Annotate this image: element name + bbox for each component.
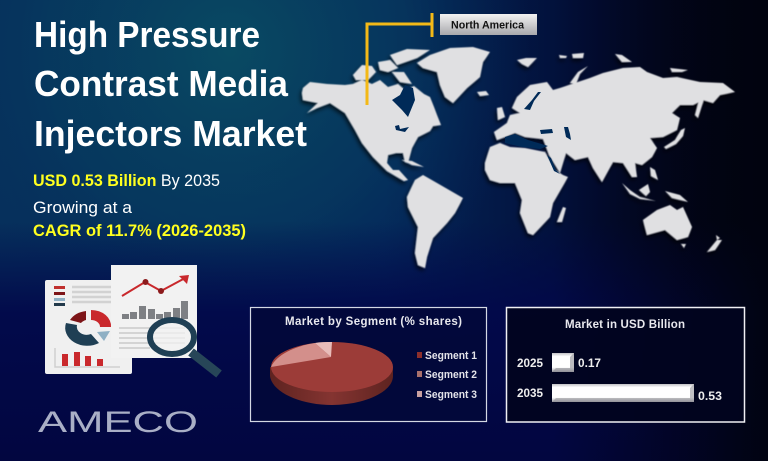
left document <box>45 280 132 374</box>
Novaya Zemlya <box>570 66 588 84</box>
panel heading: Market by Segment (% shares) <box>285 316 462 328</box>
Svalbard and arctic <box>559 53 688 72</box>
logo: AMECO <box>38 406 198 439</box>
small north Atlantic island <box>477 91 489 96</box>
right document <box>111 265 197 358</box>
title: Contrast Media <box>34 63 289 104</box>
market value text: USD 0.53 Billion By 2035 <box>33 171 220 190</box>
title: Injectors Market <box>34 113 307 154</box>
Tasmania <box>681 244 686 248</box>
New Guinea <box>665 191 688 202</box>
market value text: CAGR of 11.7% (2026-2035) <box>33 221 246 240</box>
Philippines <box>650 167 658 180</box>
Iceland <box>517 58 537 67</box>
Cuba <box>402 160 424 167</box>
icon: report documents with magnifier <box>45 265 219 374</box>
North America <box>302 80 441 181</box>
magnifier <box>150 320 219 374</box>
bar 2025 <box>517 353 601 372</box>
bar 2035: 2035 <box>517 386 543 400</box>
Kamchatka <box>695 99 704 118</box>
region label: North America <box>451 20 525 32</box>
bar 2025: 2025 <box>517 356 543 370</box>
connector line <box>367 13 432 105</box>
UK <box>497 107 505 120</box>
market value text <box>33 171 246 240</box>
Africa <box>485 143 568 235</box>
market value text: Growing at a <box>33 198 133 217</box>
Borneo <box>639 184 650 196</box>
inland seas <box>392 85 571 174</box>
panel heading: Market in USD Billion <box>565 319 685 331</box>
South America <box>407 175 463 268</box>
title: High Pressure <box>34 14 260 55</box>
Eurasia <box>494 67 735 182</box>
legend: Segment 1 <box>425 350 477 362</box>
bar 2025: 0.17 <box>578 356 601 370</box>
panel: market in USD billion <box>506 308 744 422</box>
world map <box>302 47 735 268</box>
Madagascar <box>557 207 566 222</box>
bar 2035 <box>517 384 722 403</box>
legend: Segment 2 <box>425 369 477 381</box>
Japan <box>664 128 685 149</box>
region label <box>440 14 537 35</box>
Australia <box>643 205 692 240</box>
Greenland <box>417 47 490 103</box>
Arctic islands <box>353 49 430 84</box>
New Zealand <box>707 235 722 252</box>
bar 2035: 0.53 <box>698 389 722 403</box>
legend <box>417 350 477 401</box>
Sumatra and Java <box>622 183 656 201</box>
pie chart <box>270 342 393 405</box>
title <box>34 14 307 154</box>
legend: Segment 3 <box>425 389 477 401</box>
panel: market by segment <box>250 308 486 422</box>
